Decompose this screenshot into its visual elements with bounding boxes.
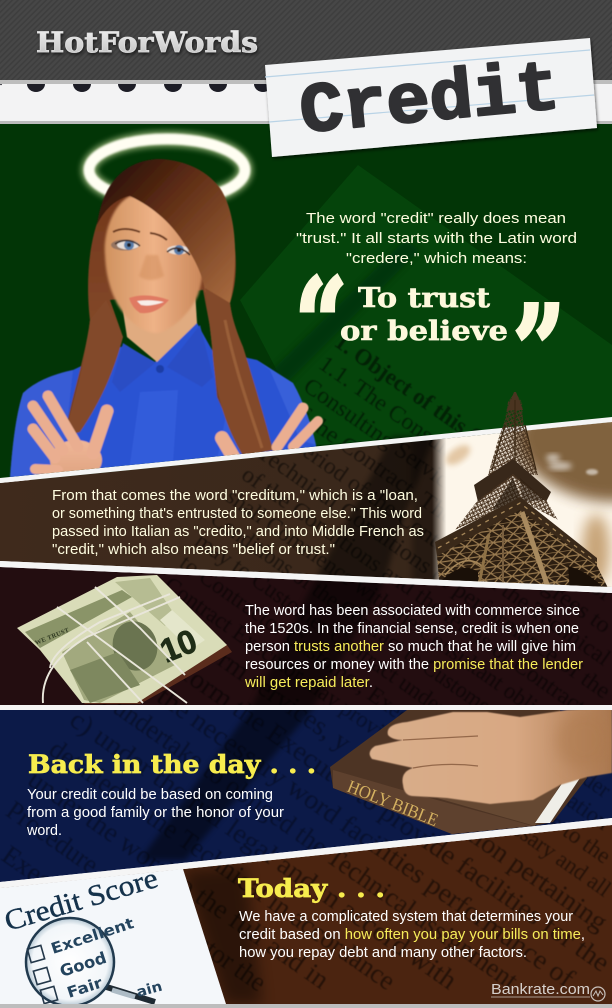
today text: how you repay debt and many other factors. — [239, 945, 527, 961]
panel: today brown background — [0, 825, 612, 1004]
checklist labels: ain — [135, 979, 164, 1001]
document texture text: to perform the Executor to provide facilities for the — [123, 620, 612, 977]
document texture text: 1.1. The Consultant shall perform all — [315, 351, 612, 572]
intro text: "credere," which means: — [346, 251, 527, 267]
shirt — [10, 323, 316, 478]
left hand — [33, 396, 107, 480]
document texture text: of the Contract. The Executor agrees to — [284, 395, 612, 638]
photo: bundle of cash — [17, 575, 232, 704]
brand title: HotForWords — [36, 26, 258, 59]
back in the day text: Your credit could be based on coming — [27, 787, 273, 803]
document texture text: Execution control the — [0, 839, 206, 999]
document texture text — [0, 329, 612, 1000]
dark shade beside checklist — [183, 866, 262, 1004]
document texture text: may to Customer Contract under the agreed obligation — [191, 528, 612, 835]
upper lattice — [488, 392, 538, 475]
panel: commerce maroon background — [0, 567, 612, 705]
checklist labels: Good — [57, 948, 109, 981]
photo: credit score checklist — [0, 862, 230, 1006]
lips — [129, 295, 169, 313]
We Trust microtext: WE TRUST — [34, 627, 71, 647]
pen shadow — [140, 436, 434, 860]
magnifying glass — [26, 918, 155, 1006]
pull quote: ” — [513, 278, 565, 422]
fringe — [97, 159, 235, 303]
document texture text: Contract Executor may provide under any necessary and all — [160, 572, 612, 902]
commerce text: the 1520s. In the financial sense, credit is when one — [245, 621, 579, 637]
today text — [239, 909, 585, 961]
string around bundle — [43, 587, 187, 703]
document texture text: a) to the necessary word facilities performance of — [104, 647, 580, 993]
panel: back in the day navy background — [0, 710, 612, 882]
brows and eyes — [111, 229, 190, 255]
shirt folds — [130, 391, 240, 464]
photo: hand on Holy Bible — [330, 708, 612, 834]
back in the day text: from a good family or the honor of your — [27, 805, 284, 821]
etymology text: From that comes the word "creditum," which is a "loan, — [52, 488, 418, 504]
etymology text: or something that's entrusted to someone else." This word — [52, 506, 422, 522]
hand — [370, 708, 612, 804]
intro text: "trust." It all starts with the Latin word — [296, 231, 577, 247]
photo: Eiffel Tower structure — [435, 392, 610, 592]
checklist labels — [51, 918, 162, 998]
header: spiral notebook — [0, 0, 612, 124]
checkboxes — [27, 945, 58, 1004]
document texture text: Technical Conditions of performance of the — [253, 439, 612, 703]
portrait: presenter with halo — [10, 139, 318, 480]
document texture text: Procedure of the Executor the — [1, 795, 272, 997]
back in the day text — [26, 787, 284, 839]
book pages — [535, 778, 580, 823]
second platform — [435, 497, 597, 568]
right hand — [222, 408, 318, 460]
checklist labels: Excellent — [49, 914, 136, 958]
document texture text: of the Conditions and the terms of Contract, nt — [237, 461, 612, 737]
paper note: Credit title — [265, 38, 597, 157]
legs — [522, 512, 549, 590]
document texture text: shall Commence with the Consultant obligations of — [222, 483, 612, 770]
document texture text: detailed in the Technical in accordance — [44, 733, 401, 996]
commerce text: will get repaid later . — [244, 675, 373, 691]
face — [105, 196, 203, 333]
back in the day text: word. — [26, 823, 62, 839]
word Credit: Credit — [297, 51, 563, 154]
denomination 10 on bill: 10 — [155, 622, 202, 669]
commerce text — [244, 603, 583, 691]
divider bands — [0, 417, 612, 888]
document texture text: 1. Object of this Contract — [330, 329, 549, 493]
halo — [89, 139, 245, 201]
hair front strands — [65, 288, 273, 456]
neck — [122, 290, 197, 362]
document texture text: 2. Period of the Contract and the Technical — [268, 417, 612, 670]
document texture text: c) under the full legal and in accord with — [65, 704, 463, 995]
checklist labels: Fair — [65, 973, 105, 1002]
etymology text: "credit," which also means "belief or trust." — [52, 542, 335, 558]
HOLY BIBLE lettering: HOLY BIBLE — [345, 776, 441, 830]
panel: green intro background — [0, 124, 612, 480]
today text: credit based on how often you pay your bills on time , — [239, 927, 585, 943]
bottom strip — [0, 1004, 612, 1008]
pull quote — [295, 251, 565, 422]
intro text — [296, 211, 577, 267]
etymology text: passed into Italian as "credito," and into Middle French as — [52, 524, 424, 540]
intro text: The word "credit" really does mean — [306, 211, 566, 227]
base arches — [442, 568, 478, 582]
today text: We have a complicated system that determines your — [239, 909, 573, 925]
document texture text: to Contractor Customer, Executor or Bank, oblige to the — [175, 550, 612, 869]
etymology text — [52, 488, 424, 558]
credit score heading: Credit Score — [1, 862, 161, 938]
pull quote: “ — [295, 251, 347, 395]
document texture text: under the word to the full and in — [23, 764, 335, 995]
binding holes — [0, 84, 272, 92]
Bankrate logo: Bankrate.com — [491, 981, 590, 998]
panel: etymology brown background — [0, 422, 612, 587]
commerce text: resources or money with the promise that the lender — [245, 657, 583, 673]
lower structure — [437, 510, 610, 592]
commerce text: person trusts another so much that he will give him — [245, 639, 576, 655]
photo: sepia sky behind Eiffel Tower — [412, 422, 612, 587]
collar — [112, 325, 213, 392]
nose — [139, 255, 164, 280]
navy wash softening texture — [0, 710, 612, 882]
document texture text: Consulting Services under the order of — [299, 373, 612, 606]
pull quote: To trust — [358, 283, 491, 314]
heading: back in the day: Back in the day . . . — [28, 750, 316, 779]
first platform — [474, 459, 551, 502]
Bankrate logo — [491, 981, 605, 1001]
pull quote: or believe — [340, 316, 508, 347]
middle section — [455, 474, 558, 530]
commerce text: The word has been associated with commerce since — [245, 603, 580, 619]
hair back — [65, 159, 273, 456]
heading: today: Today . . . — [238, 874, 385, 903]
document texture text: to perform services, y alter information pertaining — [141, 594, 612, 937]
document texture text: b) undertake to obliged the Technical assignment — [85, 675, 524, 995]
